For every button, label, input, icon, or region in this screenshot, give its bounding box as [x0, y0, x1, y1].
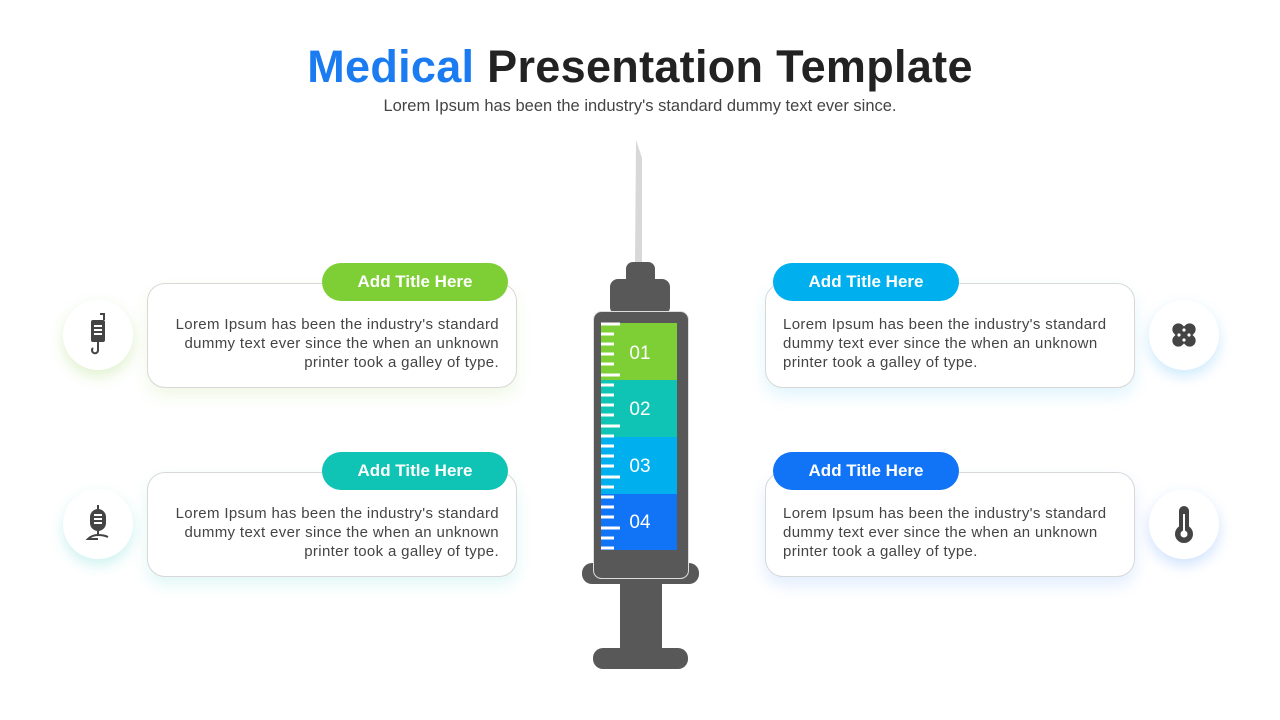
syringe [582, 140, 699, 669]
text [783, 505, 1106, 560]
icon circle: iv bag [63, 300, 133, 370]
text: printer took a galley of type. [783, 543, 978, 560]
pill title: Add Title Here [809, 272, 923, 291]
title: Medical Presentation Template [307, 41, 973, 92]
syringe: 02 [629, 399, 651, 420]
pill title [322, 263, 508, 301]
text: Lorem Ipsum has been the industry's standard [176, 316, 499, 333]
text [783, 316, 1106, 371]
pill title: Add Title Here [809, 461, 923, 480]
text: dummy text ever since the when an unknown [783, 335, 1098, 352]
pill title [773, 452, 959, 490]
segments [601, 323, 677, 380]
icon circle: bandage [1149, 300, 1219, 370]
panel: 04 right bottom [760, 452, 1225, 590]
icon circle: thermometer [1149, 489, 1219, 559]
syringe: 04 [629, 512, 651, 533]
syringe: 01 [629, 343, 651, 364]
text: Lorem Ipsum has been the industry's standard [783, 505, 1106, 522]
text: printer took a galley of type. [783, 354, 978, 371]
text: Lorem Ipsum has been the industry's standard [783, 316, 1106, 333]
ticks [601, 324, 620, 548]
text [176, 505, 499, 560]
panel: 02 left bottom [57, 452, 522, 590]
pill title [322, 452, 508, 490]
text [176, 316, 499, 371]
subtitle: Lorem Ipsum has been the industry's standard dummy text ever since. [383, 97, 897, 115]
text: Lorem Ipsum has been the industry's standard [176, 505, 499, 522]
text: printer took a galley of type. [304, 543, 499, 560]
text: dummy text ever since the when an unknown [184, 335, 499, 352]
pill title [773, 263, 959, 301]
panel: 03 right top [760, 263, 1225, 400]
text: printer took a galley of type. [304, 354, 499, 371]
pill title: Add Title Here [358, 461, 472, 480]
syringe: 03 [629, 456, 651, 477]
needle [635, 140, 642, 264]
icon circle: urine bag [63, 489, 133, 559]
panel: 01 left top [57, 263, 520, 399]
pill title: Add Title Here [358, 272, 472, 291]
text: dummy text ever since the when an unknown [184, 524, 499, 541]
text: dummy text ever since the when an unknown [783, 524, 1098, 541]
